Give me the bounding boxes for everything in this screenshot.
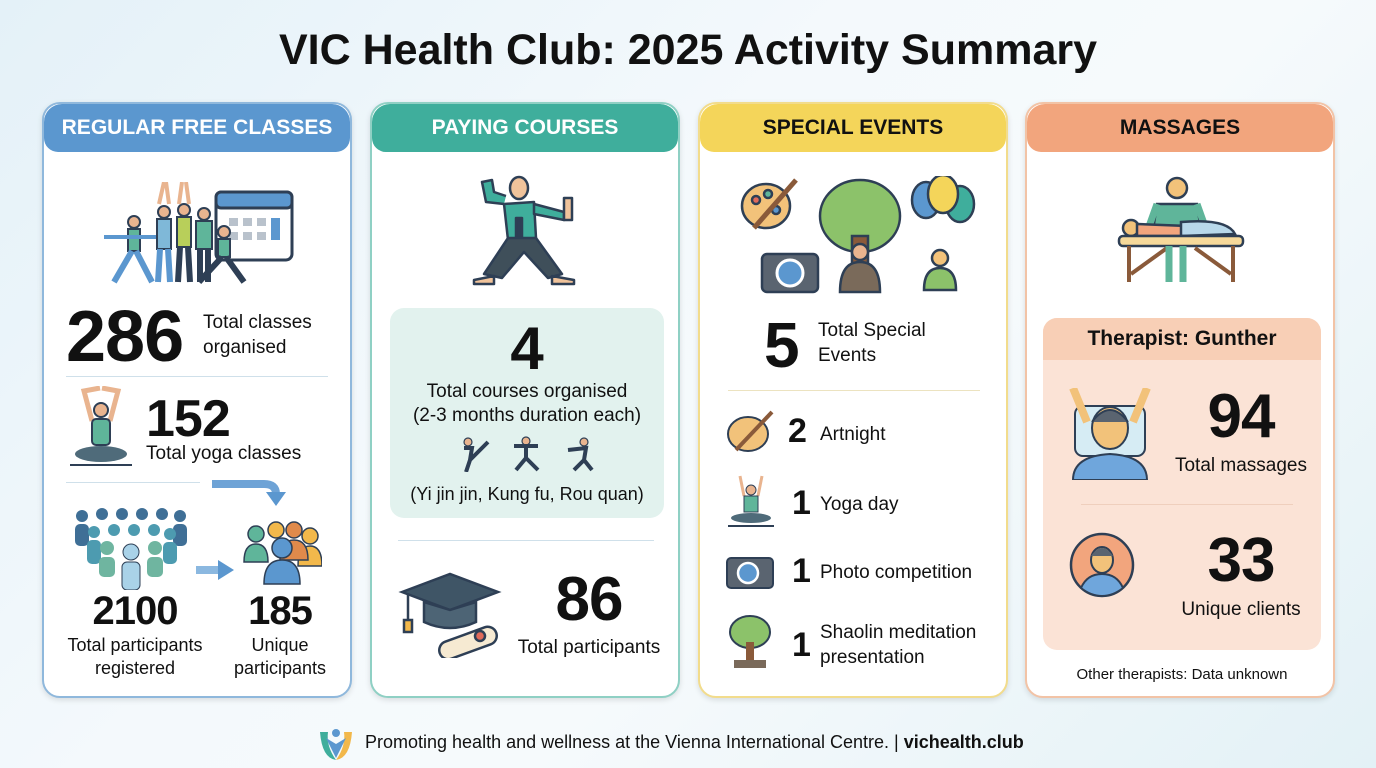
stat: 86 participants: Total participants: [518, 637, 660, 658]
icon: unique group: [243, 521, 322, 585]
box: total courses: [390, 308, 664, 518]
icon: graduation cap: [398, 572, 502, 658]
list: yoga day: Yoga day: [820, 494, 899, 515]
arrow: right: [196, 560, 234, 580]
title: VIC Health Club: 2025 Activity Summary: [279, 26, 1097, 74]
list: photo competition: 1: [792, 552, 810, 590]
list: shaolin meditation: [729, 615, 976, 668]
icon: crowd: [75, 508, 187, 590]
header: special events: [700, 104, 1006, 152]
icon: yoga person: [70, 386, 132, 466]
stat: 5 special events: [764, 309, 926, 381]
stat: 2100 participants: [67, 589, 203, 678]
stat: 5 special events: Events: [818, 345, 876, 366]
stat: 33 clients: [1181, 526, 1301, 620]
list: artnight: Artnight: [820, 424, 885, 445]
header: massages: [1027, 104, 1333, 152]
stat: 94 massages: 94: [1208, 382, 1274, 451]
subheader: therapist: Therapist: Gunther: [1087, 327, 1276, 350]
text: courses organised: [413, 381, 641, 426]
box: therapist gunther: [1043, 318, 1321, 650]
header: massages: MASSAGES: [1120, 116, 1240, 139]
stat: 185 unique: participants: [234, 658, 326, 678]
list: artnight: 2: [788, 412, 806, 450]
stat: 152 yoga classes: [146, 390, 301, 464]
stat: 185 unique: [234, 589, 326, 678]
list: shaolin meditation: 1: [792, 626, 810, 664]
stat: 33 clients: 33: [1208, 526, 1274, 595]
list: shaolin meditation: presentation: [820, 647, 925, 668]
text: courses organised: (2-3 months duration each): [413, 405, 641, 426]
panel: regular free classes: [42, 102, 352, 698]
stat: 33 clients: Unique clients: [1181, 599, 1301, 620]
note: other therapists: Other therapists: Data unknown: [1077, 666, 1287, 683]
list: artnight: [727, 410, 886, 452]
stat: 2100 participants: registered: [95, 658, 175, 678]
subheader: therapist: [1043, 318, 1321, 360]
footer: [320, 729, 1024, 760]
stat: 5 special events: Total Special: [818, 320, 926, 341]
icon: events cluster: [740, 176, 976, 294]
header: special events: SPECIAL EVENTS: [763, 116, 943, 139]
text: course names: (Yi jin jin, Kung fu, Rou quan): [410, 484, 644, 504]
stat: 5 special events: 5: [764, 309, 799, 381]
icon: martial artist: [472, 176, 576, 286]
text: footer: Promoting health and wellness at the Vienna International Centre. | vichealth.club: [365, 732, 1024, 752]
list: yoga day: 1: [792, 484, 810, 522]
arrow: curved blue: [212, 480, 286, 506]
stat: 152 yoga classes: 152: [146, 390, 230, 448]
panel: paying courses: [370, 102, 680, 698]
stat: 94 massages: Total massages: [1175, 455, 1307, 476]
stat: 94 massages: [1175, 382, 1307, 476]
stat: 286 classes: [66, 297, 312, 377]
list: shaolin meditation: Shaolin meditation: [820, 622, 976, 643]
list: photo competition: Photo competition: [820, 562, 972, 583]
stat: 286 classes: 286: [66, 297, 183, 377]
stat: 185 unique: Unique: [251, 635, 309, 655]
list: photo competition: [726, 552, 972, 590]
icon: logo: [320, 729, 352, 760]
panel: massages: [1025, 102, 1335, 698]
header: paying courses: PAYING COURSES: [432, 116, 618, 139]
list: yoga day: [728, 476, 899, 527]
stat: 86 participants: 86: [556, 565, 622, 634]
icon: massage table: [1118, 176, 1244, 282]
stat: 86 participants: [518, 565, 660, 658]
header: regular free classes: REGULAR FREE CLASSES: [62, 116, 332, 139]
header: paying courses: [372, 104, 678, 152]
stat: 4 courses: 4: [510, 315, 544, 382]
panel: special events: [698, 102, 1008, 698]
stat: 2100 participants: Total participants: [67, 635, 203, 655]
stat: 152 yoga classes: Total yoga classes: [146, 443, 301, 464]
stat: 2100 participants: 2100: [92, 589, 177, 633]
icon: three martial artists: [463, 436, 594, 472]
stat: 286 classes: organised: [203, 337, 286, 358]
header: regular free classes: [44, 104, 350, 152]
icon: group yoga and calendar: [104, 182, 294, 284]
icon: client avatar: [1070, 532, 1134, 598]
stat: 185 unique: 185: [248, 589, 312, 633]
text: courses organised: Total courses organised: [427, 381, 627, 402]
stat: 286 classes: Total classes: [203, 312, 312, 333]
icon: head massage: [1069, 388, 1151, 480]
